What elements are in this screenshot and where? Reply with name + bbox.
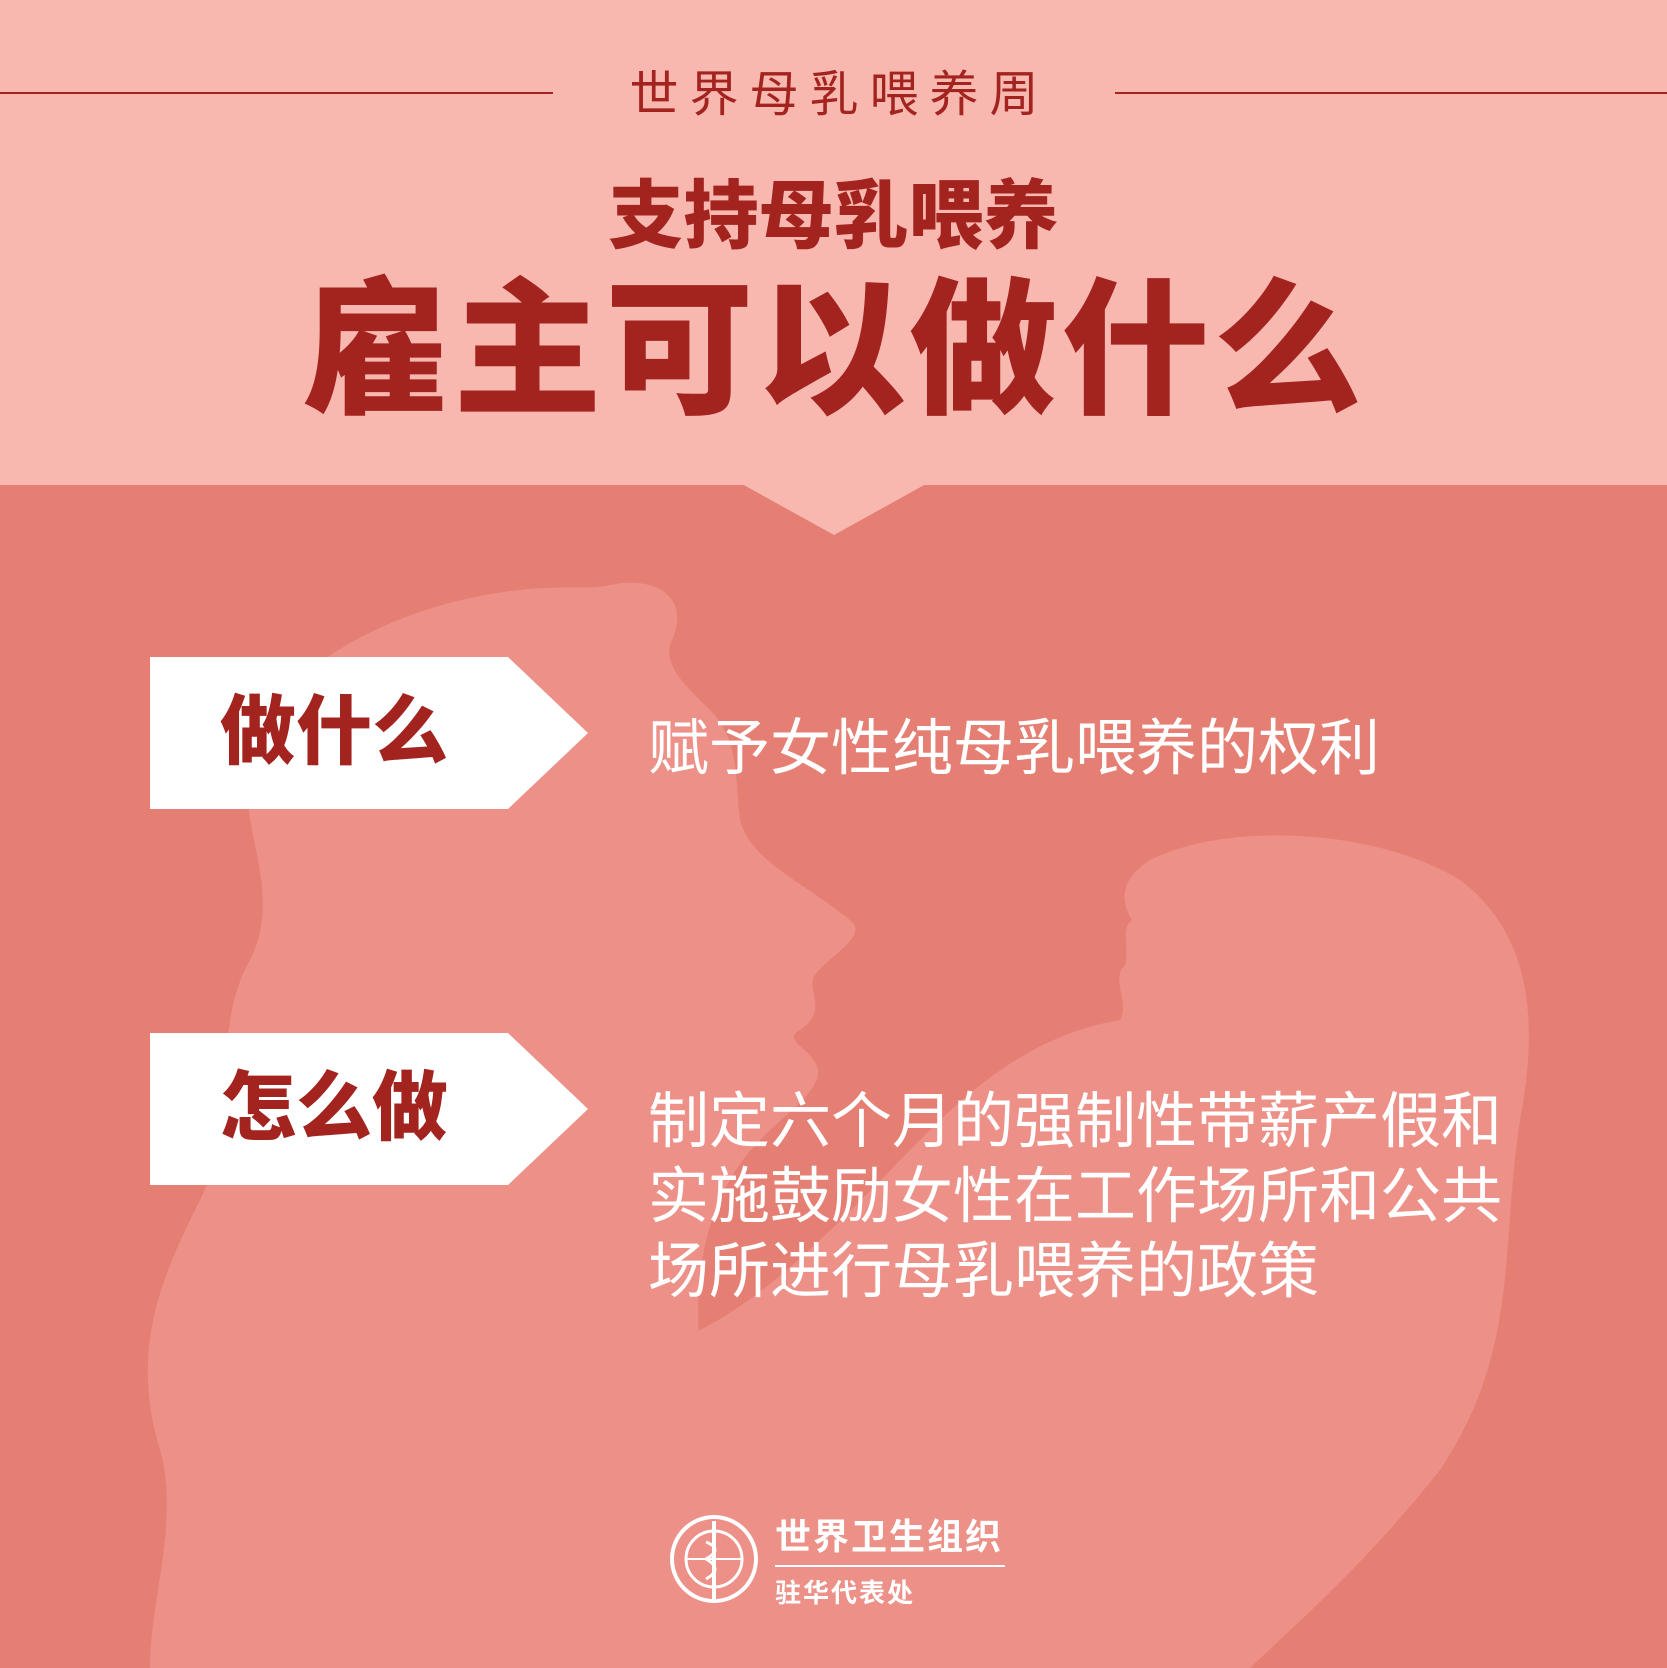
text: how: 场所进行母乳喂养的政策 (648, 1237, 1319, 1305)
label: how (150, 1033, 588, 1185)
text: how: 实施鼓励女性在工作场所和公共 (648, 1162, 1502, 1230)
logo: WHO: 世界卫生组织 (775, 1516, 1003, 1557)
text: how (648, 1087, 1502, 1305)
logo: WHO: 驻华代表处 (775, 1578, 915, 1608)
heading: 支持母乳喂养 (608, 174, 1058, 258)
notch arrow (744, 485, 924, 535)
icon: WHO emblem (670, 1515, 758, 1603)
header band (0, 0, 1667, 485)
text: what: 赋予女性纯母乳喂养的权利 (648, 714, 1380, 782)
main title: 雇主可以做什么 (302, 269, 1366, 434)
label: what (150, 657, 588, 809)
label: what: 做什么 (220, 690, 448, 775)
label: how: 怎么做 (220, 1066, 448, 1151)
logo: WHO (670, 1515, 1005, 1608)
text: how: 制定六个月的强制性带薪产假和 (648, 1087, 1502, 1155)
subtitle: week: 世界母乳喂养周 (629, 68, 1050, 122)
